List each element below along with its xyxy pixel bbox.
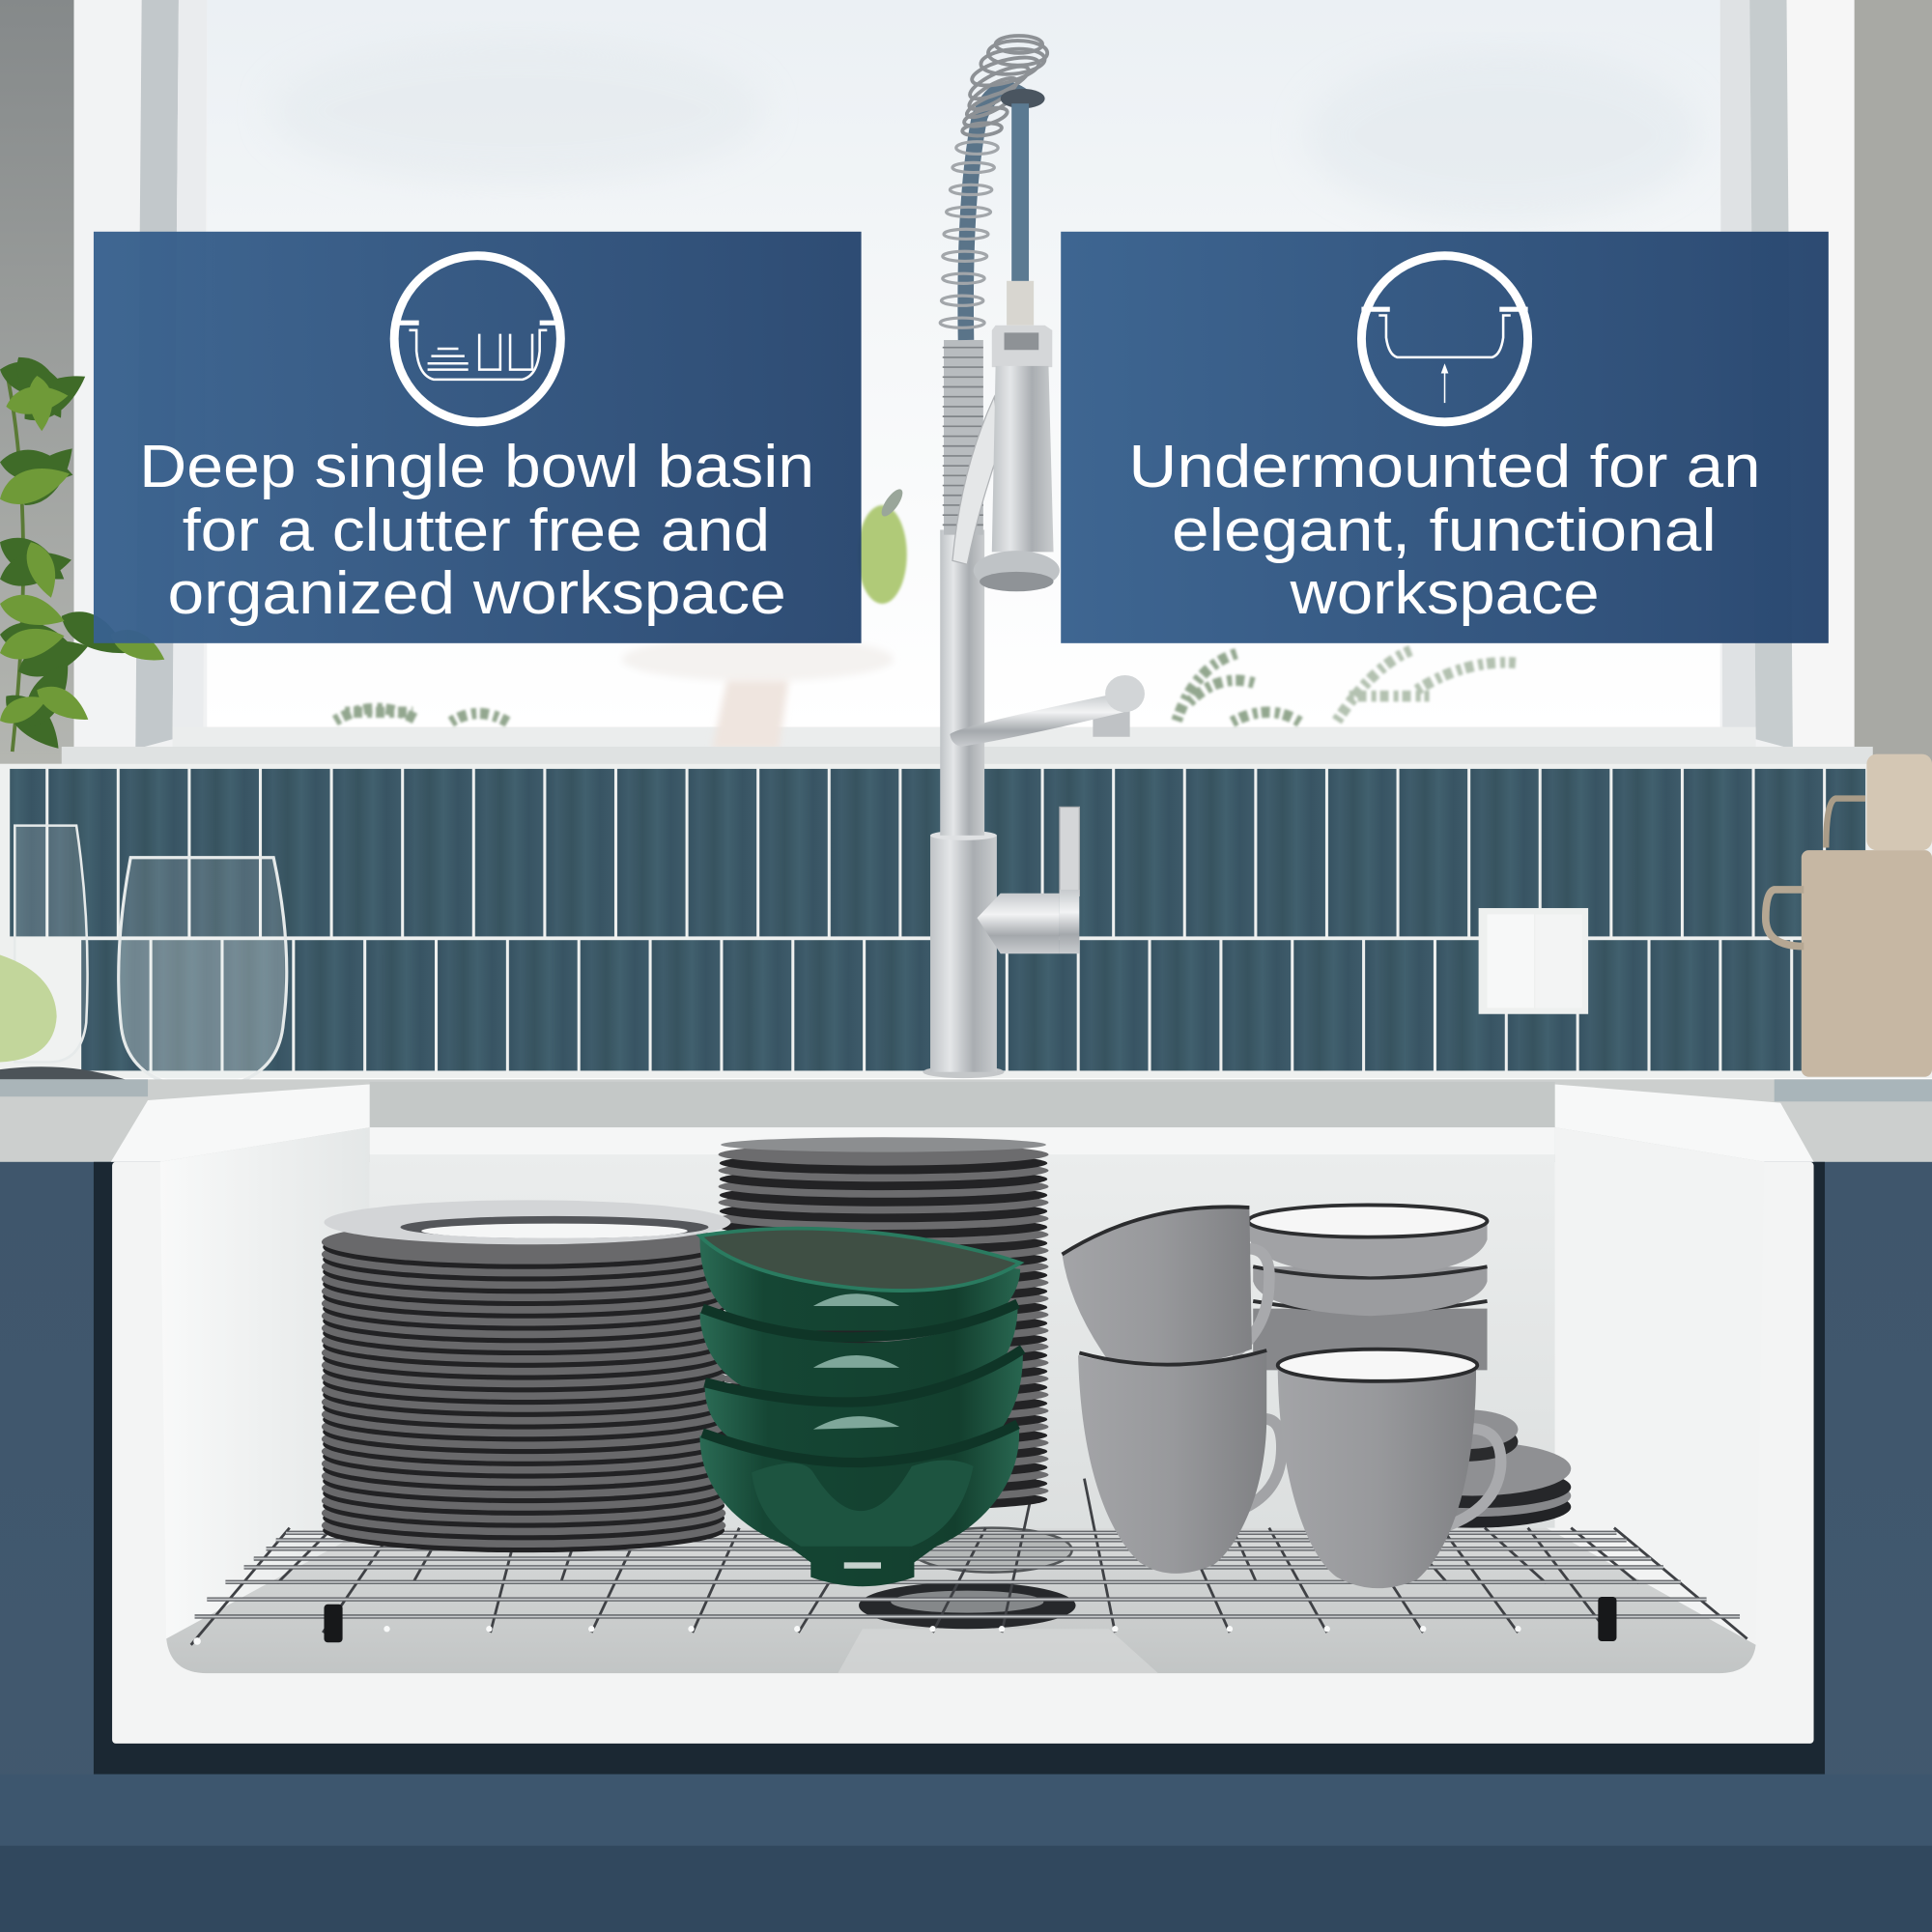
heading text: organized workspace [167,559,786,627]
grey bowls [1248,1205,1488,1370]
front plate stack [322,1200,730,1552]
front mug [1278,1350,1501,1588]
spray hose dome [962,36,1047,137]
window and sky background [0,0,1932,764]
wall switch [1479,908,1588,1014]
tiled backsplash [0,764,1932,1078]
cabinets [0,1162,1932,1932]
heading text: Undermounted for an [1128,433,1761,500]
drinking glasses and lime [0,826,287,1090]
panel: undermounted [1061,232,1829,643]
sink grid rack [191,1479,1747,1645]
plant [0,347,170,758]
heading text: workspace [1289,559,1600,627]
countertop [0,1079,1932,1163]
faucet [923,36,1145,1078]
heading text [139,433,814,627]
small plates behind mugs [1374,1409,1571,1528]
stacked mugs [1062,1207,1282,1574]
window sill [62,747,1873,766]
trees outside window [335,650,1516,722]
back plate stack [719,1137,1048,1511]
green bowls [699,1229,1023,1586]
beige canisters [1766,754,1932,1077]
heading text: Deep single bowl basin [139,433,814,500]
panel: deep single bowl basin [94,232,862,643]
sink [111,1084,1814,1744]
icon: basin with dishes [394,256,560,422]
folded towel [0,1066,139,1094]
drain [859,1528,1076,1629]
heading text [1128,433,1761,627]
icon: undermount sink with arrow [1361,256,1528,422]
heading text: for a clutter free and [183,497,770,564]
heading text: elegant, functional [1172,497,1717,564]
blurred cake stand with apples [622,486,907,750]
